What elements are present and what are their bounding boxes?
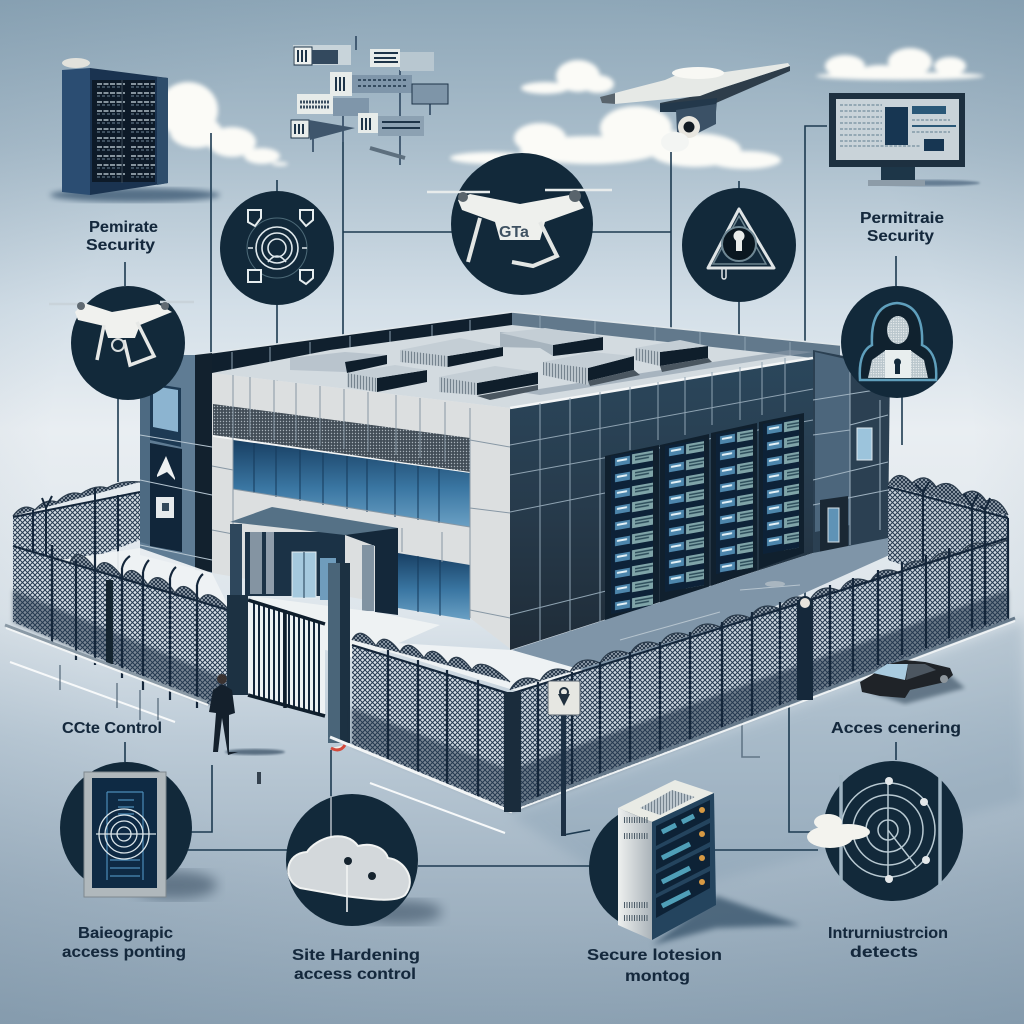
circle: biometric panel [60,762,217,899]
roof vents [290,328,712,400]
panel: perimeter screen wall [50,58,220,202]
label: site hardening [292,947,420,983]
circle: side drone [49,286,194,400]
label: intrusion detection: Intrurniustrcion [828,925,948,942]
parapet [196,312,840,375]
perimeter fence front left [330,633,512,812]
fence: rear left [13,482,140,660]
ground plaza [60,538,905,692]
front facade [212,373,512,660]
cloud: upper left [158,82,288,166]
icon: CCTV aerial camera [600,63,790,152]
label: perimeter security left: Security [86,237,155,254]
label: site hardening: Site Hardening [292,947,420,964]
label: site hardening: access control [294,966,416,983]
label: biometric access: Baieograpic [78,925,173,942]
windows lower band [398,553,470,620]
vent: right centre [543,352,640,386]
windows upper band [233,440,470,527]
label: intrusion detection [828,925,948,961]
label: perimeter security right: Permitraie [860,210,944,227]
icon: small cloud [807,814,870,848]
perimeter fence front right [504,530,1015,812]
label: secure location: montog [625,968,690,985]
icon: monitor [829,93,980,186]
label: secure location: Secure lotesion [587,947,722,964]
right wall [510,358,813,650]
front gate [227,563,350,743]
label: intrusion detection: detects [850,944,918,961]
circle: site hardening cloud [286,794,442,926]
label: biometric access [62,925,186,961]
label: cctv control: CCte Control [62,720,162,737]
vent: front centre [439,366,538,400]
rear tower [813,350,890,553]
label: perimeter security left: Pemirate [89,219,158,236]
clouds [158,48,984,169]
cloud: upper centre [521,60,614,94]
roof [212,325,813,412]
entrance canopy [230,507,440,660]
vent: back centre [500,328,603,356]
circle: security drone [427,153,612,295]
circle: biometric identity [841,286,953,398]
left tower [140,353,212,573]
car [860,660,965,704]
vent: front left [347,365,427,392]
label: access centering: Acces cenering [831,720,961,737]
label: perimeter security right [860,210,944,245]
building [140,312,890,660]
circle: warning keyhole [682,188,796,302]
ground reflections [10,662,760,833]
cloud: upper right [816,48,984,80]
connector lines [118,126,902,866]
server racks on wall [605,413,804,622]
label: perimeter security right: Security [867,228,934,245]
label: perimeter security left [86,219,158,254]
label: secure location [587,947,722,985]
vent: back left [400,338,503,367]
circle: security drone: GTa [499,224,529,241]
circle: secure server [589,780,800,945]
label: biometric access: access ponting [62,944,186,961]
icon: floating data blocks [291,36,448,165]
vent: rounded left [290,352,387,373]
person [209,674,345,784]
sign on pole [548,681,580,836]
perimeter fence left [5,540,228,712]
cloud: centre band [450,106,781,169]
vent: back right [635,340,712,372]
back fence right [888,475,1008,620]
circle: intrusion radar [807,761,963,901]
circle: fingerprint shield [220,191,334,305]
